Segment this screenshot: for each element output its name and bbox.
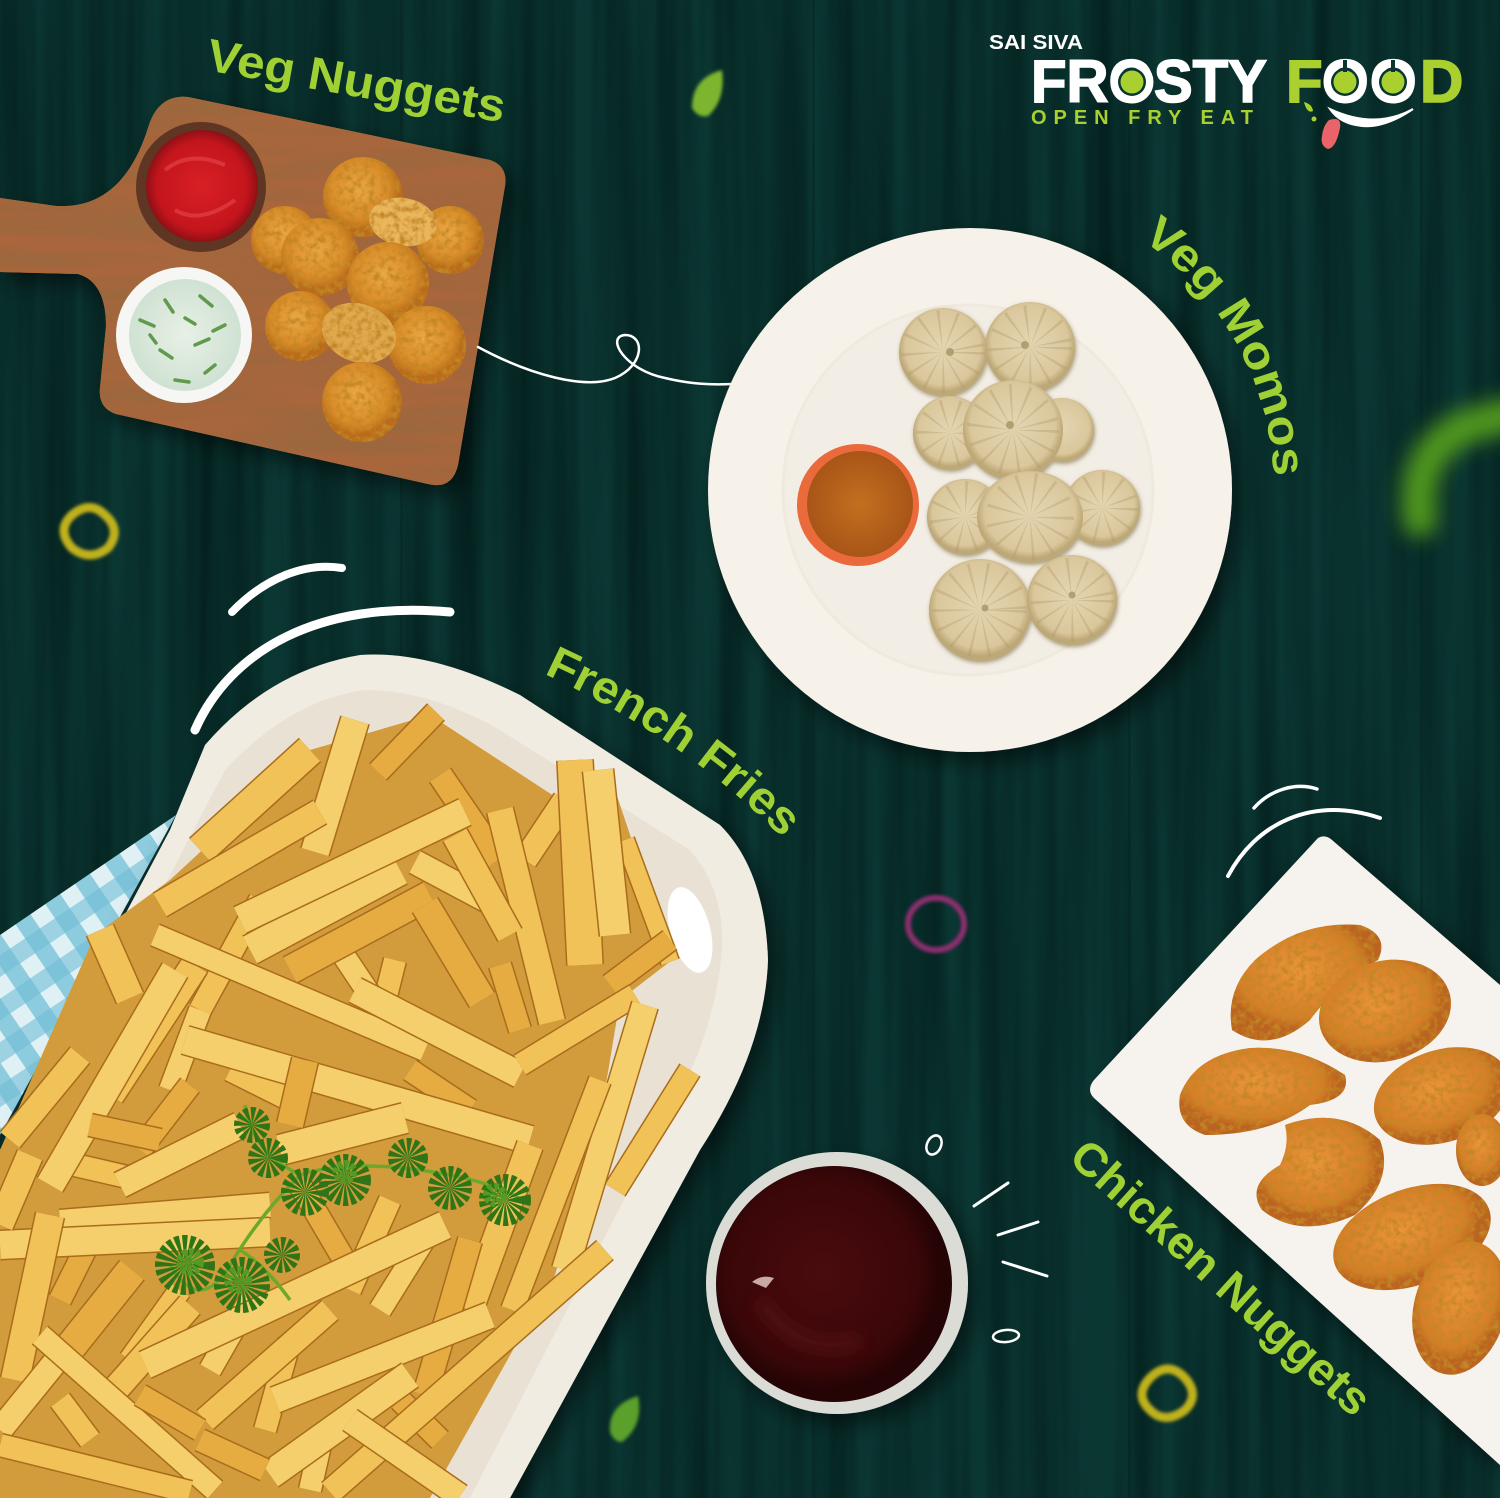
heading: Chicken Nuggets: Chicken Nuggets bbox=[1060, 1129, 1382, 1426]
logo: Sai Siva Frosty Food bbox=[989, 32, 1463, 149]
sauce cup bbox=[797, 444, 919, 566]
logo text: Food: D bbox=[1420, 48, 1463, 115]
heading: Veg Nuggets: Veg Nuggets bbox=[203, 29, 510, 132]
panel: veg momos plate bbox=[708, 228, 1232, 752]
logo eye in Frosty bbox=[1114, 64, 1150, 100]
logo tagline: OPEN FRY EAT bbox=[1031, 107, 1253, 129]
decoration: yellow pepper ring bbox=[64, 508, 114, 555]
heading: French Fries: French Fries bbox=[546, 646, 795, 834]
logo smile bbox=[1330, 109, 1413, 126]
decoration: blurred green pepper bbox=[1419, 415, 1500, 520]
motion arcs above chicken plate bbox=[1228, 786, 1380, 876]
decoration: yellow pepper ring lower bbox=[1142, 1369, 1192, 1418]
panel: veg nuggets board bbox=[0, 97, 505, 485]
logo text: Food: O bbox=[1322, 48, 1369, 115]
wooden board bbox=[0, 97, 505, 485]
logo text: Food: O bbox=[1370, 48, 1417, 115]
momos bbox=[899, 302, 1140, 661]
logo tongue bbox=[1322, 119, 1340, 149]
logo text: Frosty: FROSTY bbox=[1031, 48, 1267, 115]
veg nuggets bbox=[251, 157, 484, 442]
plate bbox=[708, 228, 1232, 752]
heading: Veg Momos: Veg Momos bbox=[1152, 214, 1298, 474]
logo text: Food: F bbox=[1286, 48, 1323, 115]
underlayer of fries bbox=[60, 900, 520, 1490]
parsley garnish bbox=[170, 1105, 530, 1300]
decoration: green leaf bbox=[692, 70, 723, 116]
logo drops bbox=[1304, 102, 1316, 122]
ketchup bowl bbox=[136, 122, 266, 252]
doodle: splash marks near bowl bbox=[923, 1133, 1047, 1343]
chicken nuggets bbox=[1179, 924, 1500, 1386]
panel: french fries plate bbox=[0, 654, 768, 1498]
dip bowl bbox=[116, 267, 252, 403]
decoration: motion arcs above fries bbox=[195, 567, 450, 730]
decoration: onion ring bbox=[908, 898, 964, 950]
panel: dipping sauce bowl bbox=[706, 1152, 968, 1414]
fries pile base bbox=[0, 715, 672, 1498]
decoration: green leaf lower bbox=[610, 1396, 639, 1442]
fries bbox=[0, 712, 690, 1496]
panel: blue checked napkin bbox=[0, 815, 176, 1135]
panel: chicken nuggets plate bbox=[1090, 836, 1500, 1465]
logo text: Sai Siva: SAI SIVA bbox=[989, 32, 1083, 54]
white plate bbox=[1090, 836, 1500, 1465]
logo eyes in Food bbox=[1327, 60, 1411, 100]
white plate bbox=[0, 654, 768, 1498]
connector squiggle arrow bbox=[478, 335, 732, 384]
